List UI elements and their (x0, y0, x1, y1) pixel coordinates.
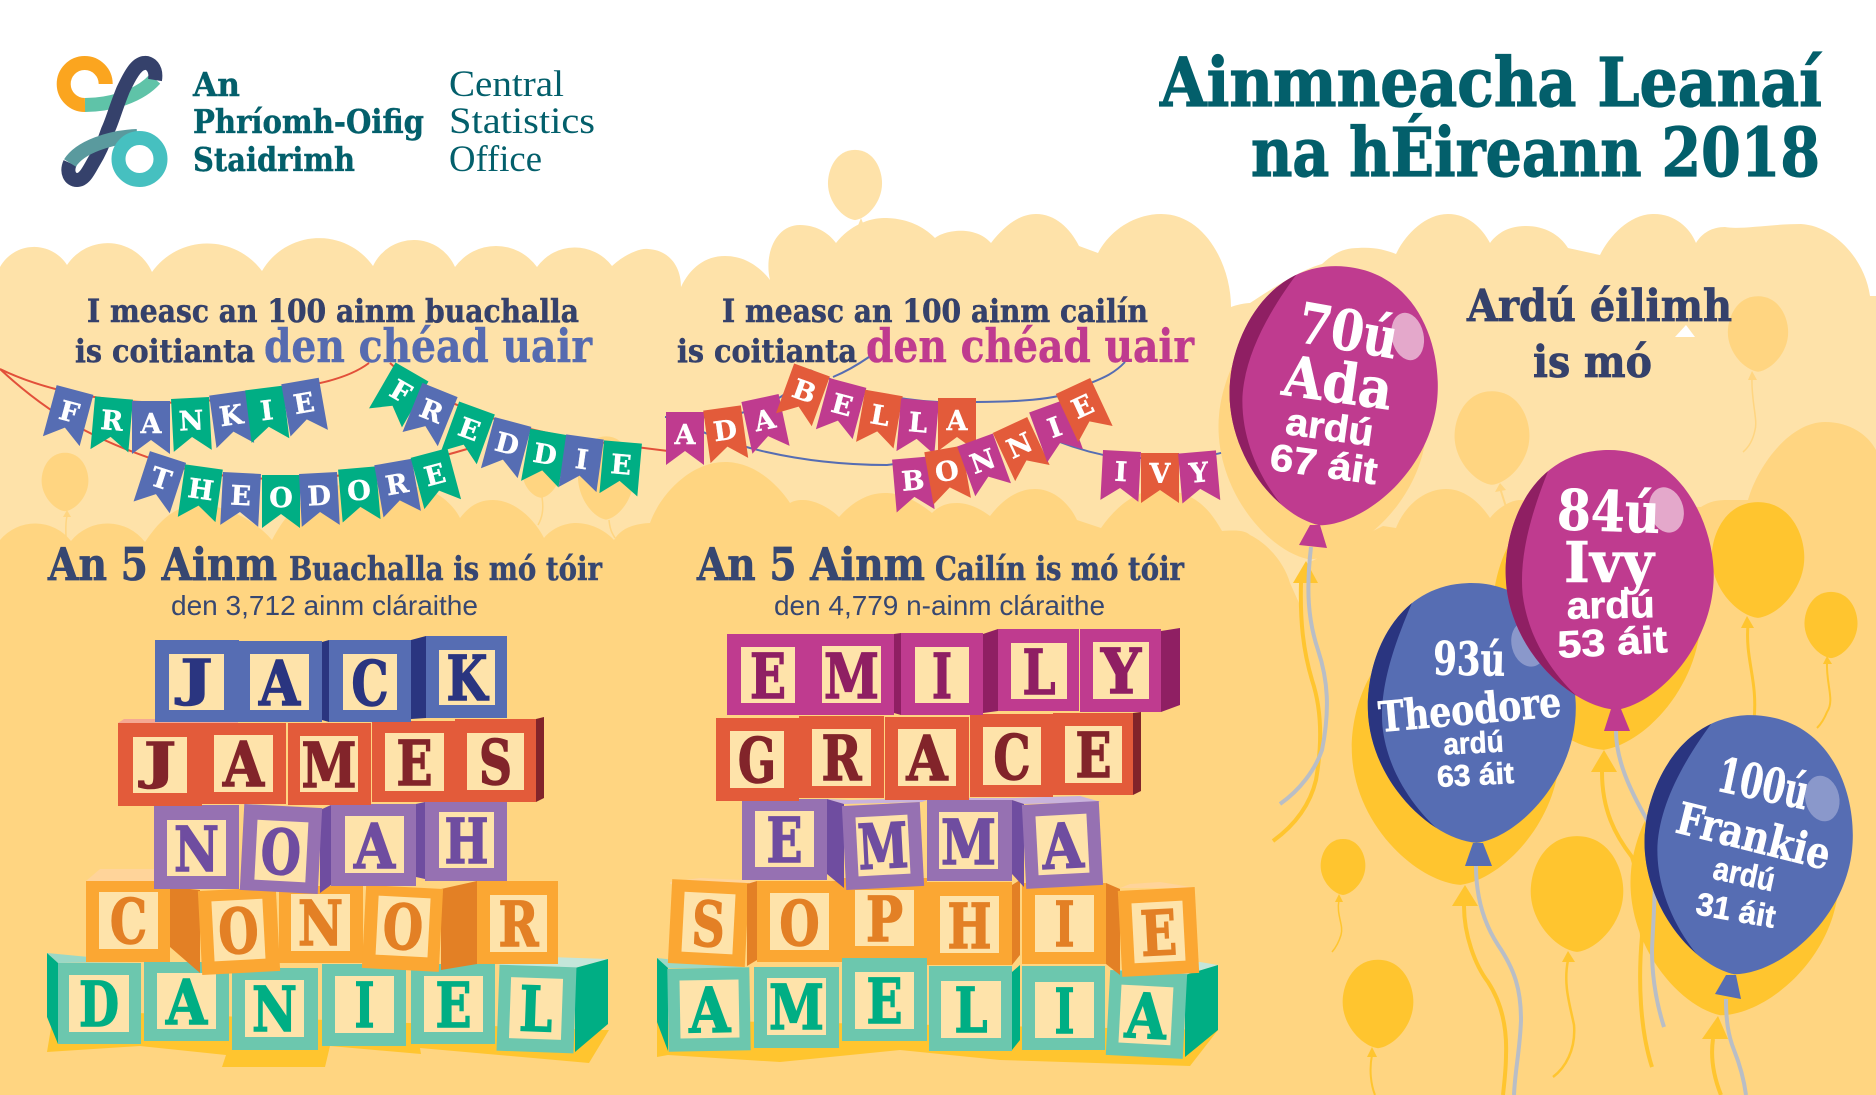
bunting: IVY (1100, 450, 1220, 503)
bunting: IVY: V (1149, 459, 1172, 490)
blocks: SOPHIE: S (690, 887, 727, 962)
bunting: BELLA (776, 364, 976, 454)
blocks: EMMA (742, 796, 1103, 890)
blocks: NOAH: A (353, 810, 396, 883)
balloon: Ada up 67 places: ardú (1283, 401, 1376, 455)
bunting: IVY: Y (1187, 457, 1211, 490)
blocks: NOAH (154, 802, 507, 894)
bunting: BONNIE: O (933, 455, 961, 489)
balloon: Frankie up 31 places: Frankie (1671, 793, 1836, 881)
heading: biggest climbers: is mó (1533, 337, 1652, 388)
shadow under boys blocks (47, 1010, 609, 1067)
heading: boys first time in top 100: I measc an 100 ainm buachalla (87, 292, 579, 330)
bunting: BONNIE: I (1044, 411, 1066, 445)
balloon: Frankie up 31 places: 31 áit (1693, 885, 1779, 935)
blocks: DANIEL: L (518, 972, 554, 1047)
shadow under girls blocks (657, 1020, 1218, 1066)
blocks: AMELIA: M (769, 971, 824, 1044)
heading: top 5 boys names: An 5 Ainm (47, 538, 277, 591)
blocks: DANIEL: A (165, 966, 208, 1039)
heading: top 5 girls names: Cailín is mó tóir (935, 549, 1185, 588)
bunting strings: girls (665, 357, 1240, 465)
blocks: GRACE: C (994, 721, 1030, 794)
bunting: FREDDIE: D (531, 438, 559, 472)
balloon: Frankie up 31 places (1644, 715, 1853, 999)
blocks: JACK: A (258, 647, 301, 720)
blocks: JAMES: S (479, 726, 512, 799)
blocks: JACK: K (446, 642, 489, 715)
bunting: BELLA: L (868, 399, 892, 433)
blocks: EMMA: E (766, 804, 802, 877)
bunting: BONNIE: E (1067, 389, 1099, 426)
bunting: FREDDIE: I (573, 444, 590, 477)
blocks: SOPHIE: H (948, 890, 992, 963)
bunting: FREDDIE: E (609, 449, 633, 482)
balloon: Ada up 67 places: Ada (1278, 343, 1397, 424)
blocks: CONOR: R (498, 888, 539, 961)
logo text: Irish name: An (192, 65, 240, 104)
bunting: BELLA: A (946, 406, 969, 437)
bunting strings: boys (0, 363, 668, 479)
balloon shadow: Ivy (1486, 485, 1708, 1067)
blocks: AMELIA: L (954, 974, 988, 1047)
bunting: FRANKIE (43, 378, 328, 454)
blocks: AMELIA: A (1123, 979, 1169, 1054)
bunting: THEODORE (134, 448, 461, 528)
balloon: Theodore up 63 places: 63 áit (1436, 757, 1515, 794)
logo text: English name: Central (449, 64, 564, 105)
bunting: BONNIE (892, 378, 1113, 512)
blocks: CONOR (86, 869, 558, 975)
blocks: DANIEL (47, 953, 608, 1053)
icon: small white triangle under heading (1675, 325, 1695, 337)
blocks: AMELIA (657, 958, 1218, 1059)
heading: top 5 boys names: Buachalla is mó tóir (289, 549, 602, 588)
balloon shadow: Frankie (1617, 746, 1851, 1095)
logo text: English name: Statistics (449, 101, 595, 142)
heading: top 5 boys names (47, 538, 602, 621)
blocks: GRACE: R (822, 722, 862, 795)
heading: top 5 girls names (696, 538, 1185, 621)
blocks: AMELIA: E (866, 965, 902, 1038)
blocks: CONOR: O (381, 890, 425, 965)
heading: boys first time in top 100 (75, 292, 593, 373)
bunting: FREDDIE (369, 362, 642, 496)
bunting: FREDDIE: F (384, 374, 416, 411)
blocks: JAMES: J (139, 731, 176, 790)
balloon: Ivy up 53 places (1506, 450, 1714, 731)
heading: girls first time in top 100 (677, 292, 1195, 373)
bunting: THEODORE: T (146, 462, 175, 497)
background yellow balloons (1321, 502, 1858, 1095)
heading: girls first time in top 100: den chéad uair (866, 319, 1195, 373)
blocks: SOPHIE: P (866, 883, 903, 956)
balloon: Ivy up 53 places: 53 áit (1556, 619, 1669, 667)
bunting: FREDDIE: R (415, 393, 448, 431)
bunting: BELLA: B (788, 374, 820, 411)
bunting: BELLA: E (828, 388, 856, 423)
bunting: BONNIE: B (900, 465, 926, 498)
blocks: NOAH: N (174, 813, 219, 886)
blocks: SOPHIE: E (1139, 896, 1178, 971)
balloon: Ivy up 53 places: ardú (1566, 584, 1655, 628)
blocks: SOPHIE (668, 878, 1199, 977)
blocks: JAMES: E (396, 727, 432, 800)
heading: top 5 boys names: den 3,712 ainm cláraithe (171, 590, 478, 621)
icon: faint balloons on light layer (42, 296, 1788, 540)
blocks: GRACE: G (738, 724, 776, 797)
bunting: FRANKIE: F (56, 395, 82, 430)
heading: boys first time in top 100: is coitianta (75, 332, 255, 370)
blocks: SOPHIE: I (1054, 888, 1074, 961)
blocks: GRACE: E (1076, 719, 1112, 792)
balloon: Theodore up 63 places: Theodore (1376, 677, 1563, 742)
logo text: Irish name: Staidrimh (193, 140, 355, 179)
background: darker cloud layer (0, 422, 1876, 1095)
logo text: English name (449, 64, 595, 180)
blocks: CONOR: C (110, 885, 147, 958)
bunting: FREDDIE: E (454, 412, 484, 448)
bunting: THEODORE: E (421, 458, 449, 493)
balloon: Theodore up 63 places: ardú (1443, 725, 1504, 762)
logo text: Irish name: Phríomh-Oifig (193, 102, 424, 141)
icon: CSO knot symbol (64, 63, 161, 180)
heading: top 5 girls names: An 5 Ainm (696, 538, 925, 591)
bunting: ADA: A (674, 420, 697, 451)
balloon: Ivy up 53 places: Ivy (1564, 530, 1655, 596)
balloon shadow: Theodore (1348, 621, 1564, 1095)
blocks: CONOR: N (298, 887, 343, 960)
bunting: FRANKIE: K (217, 399, 247, 433)
blocks: DANIEL: E (436, 969, 472, 1042)
blocks: DANIEL: N (252, 973, 297, 1046)
blocks: JACK: C (352, 647, 388, 720)
blocks: JAMES (118, 717, 544, 806)
bunting: THEODORE: O (269, 483, 293, 514)
bunting: FRANKIE: I (259, 395, 275, 427)
blocks: EMMA: A (1039, 809, 1086, 884)
balloon: Theodore up 63 places: 93ú (1433, 631, 1506, 687)
bunting: FRANKIE: A (140, 409, 163, 440)
bunting: THEODORE: O (346, 475, 372, 508)
heading: biggest climbers (1466, 281, 1732, 388)
blocks: AMELIA: A (688, 974, 731, 1047)
heading: top 5 girls names: den 4,779 n-ainm cláraithe (774, 590, 1105, 621)
blocks: JAMES: A (222, 728, 265, 801)
bunting: BONNIE: N (1002, 427, 1038, 466)
blocks: SOPHIE: O (780, 887, 820, 960)
balloon: Theodore up 63 places (1368, 583, 1576, 866)
title (1159, 43, 1822, 192)
bunting: THEODORE: D (307, 480, 332, 513)
balloon: Ada up 67 places: 70ú (1293, 290, 1403, 372)
bunting: ADA (666, 394, 790, 465)
heading: boys first time in top 100: den chéad uair (264, 319, 593, 373)
blocks: GRACE: A (906, 722, 948, 795)
bunting: FRANKIE: E (291, 387, 317, 421)
balloon strings: grey (1280, 547, 1746, 1095)
balloon: Frankie up 31 places: 100ú (1713, 747, 1814, 821)
bunting: ADA: A (750, 403, 779, 439)
logo text: English name: Office (449, 139, 542, 180)
balloon: Ivy up 53 places: 84ú (1556, 477, 1661, 547)
balloon shadow: Ada (1205, 290, 1439, 841)
blocks: JACK (155, 636, 507, 722)
blocks: EMMA: M (856, 809, 910, 884)
blocks: EMMA: M (941, 806, 996, 879)
bunting: THEODORE: H (186, 473, 216, 507)
blocks: EMILY: Y (1100, 635, 1142, 708)
blocks: EMILY: L (1022, 636, 1056, 709)
heading: girls first time in top 100: I measc an 100 ainm cailín (722, 292, 1148, 330)
blocks: EMILY: M (824, 640, 879, 713)
blocks: NOAH: H (444, 805, 488, 878)
blocks: GRACE (716, 712, 1141, 801)
bunting: BELLA: L (907, 407, 929, 440)
balloon: Ada up 67 places (1230, 266, 1438, 548)
heading: biggest climbers: Ardú éilimh (1466, 281, 1732, 332)
icon: light background balloon at top (828, 150, 882, 228)
blocks: CONOR: O (217, 894, 260, 969)
blocks: NOAH: O (259, 815, 303, 890)
balloon: Frankie up 31 places: ardú (1710, 850, 1778, 898)
bunting: FRANKIE: R (99, 405, 125, 438)
logo text: Irish name (192, 65, 424, 179)
heading: girls first time in top 100: is coitianta (677, 332, 857, 370)
bunting: IVY: I (1114, 457, 1128, 488)
blocks: DANIEL: I (354, 969, 374, 1042)
bunting: FRANKIE: N (178, 405, 204, 438)
bunting: BONNIE: N (966, 443, 1000, 481)
blocks: EMILY: E (750, 640, 786, 713)
blocks: JAMES: M (302, 729, 356, 802)
bunting: ADA: D (712, 414, 739, 448)
bunting: FREDDIE: D (492, 427, 522, 463)
blocks: EMILY: I (932, 640, 952, 713)
blocks: JACK: J (175, 648, 212, 707)
balloon: Ada up 67 places: 67 áit (1267, 437, 1380, 493)
blocks: AMELIA: I (1054, 975, 1074, 1048)
bunting: THEODORE: E (230, 480, 252, 512)
bunting: THEODORE: R (383, 468, 411, 502)
logo: Central Statistics Office (64, 63, 595, 180)
blocks: DANIEL: D (79, 968, 119, 1041)
blocks: EMILY (727, 628, 1180, 715)
